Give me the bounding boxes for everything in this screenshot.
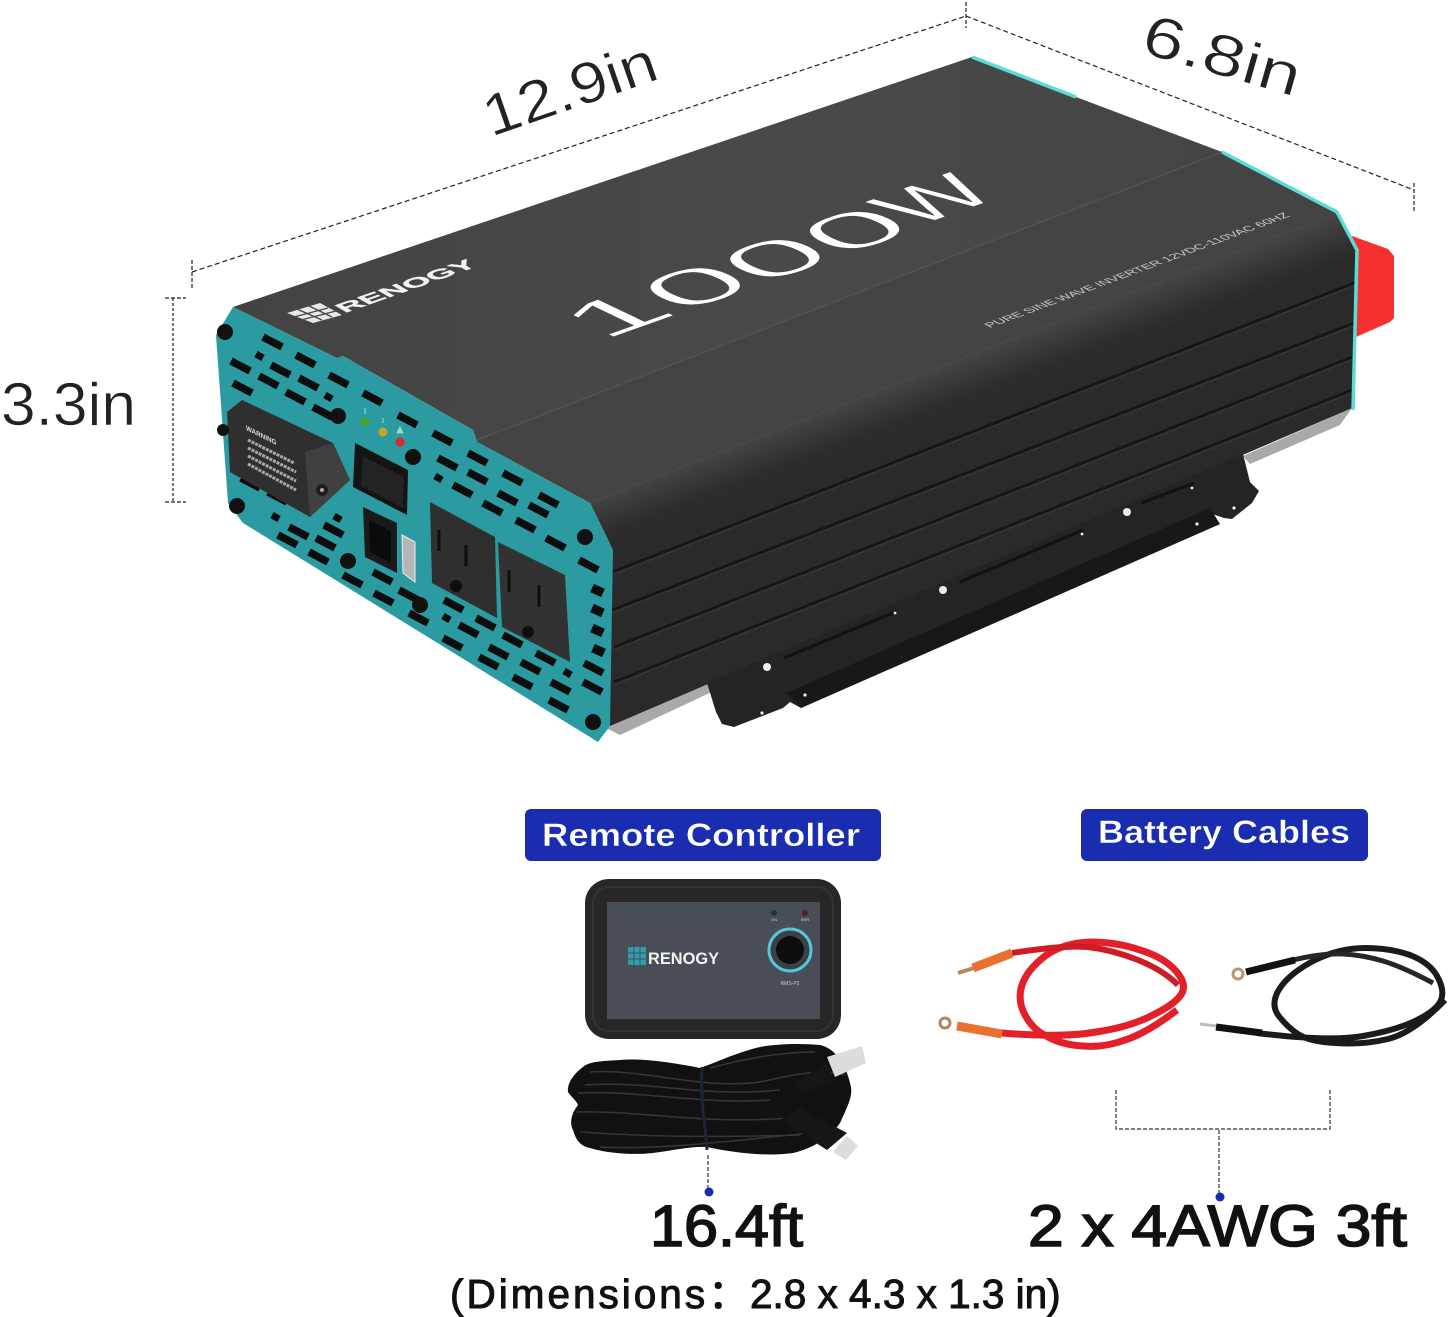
dimension: depth 6.8in [966, 2, 1414, 212]
AC outlet 2 [498, 542, 570, 662]
black battery cable [1200, 948, 1445, 1044]
top face [233, 57, 1337, 503]
orange sleeves and lugs [940, 953, 1012, 1034]
side face with grooves [590, 213, 1356, 726]
AC terminal box with warning label: WARNING [246, 425, 277, 447]
bracket: cable callout [1116, 1090, 1330, 1202]
label: Battery Cables: Battery Cables [1098, 814, 1350, 850]
cable tie [702, 1067, 707, 1150]
AC terminal box with warning label [227, 400, 350, 517]
lid ridge strip [477, 152, 1337, 503]
label: Remote Controller: Remote Controller [542, 817, 860, 853]
leader: remote cable [704, 1155, 714, 1196]
remote logo: RENOGY [648, 949, 720, 968]
USB port [402, 535, 415, 582]
remote LEDs: ON [771, 917, 777, 922]
red terminal cover [1352, 236, 1394, 337]
panel screws [217, 324, 601, 730]
teal rear edge [972, 57, 1357, 410]
remote logo [628, 947, 720, 968]
bracket holes [760, 487, 1236, 715]
coiled remote cable [568, 1044, 866, 1160]
Renogy logo on lid [287, 257, 484, 323]
model text on lid: PURE SINE WAVE INVERTER 12VDC-110VAC 60HZ [982, 211, 1294, 330]
status LEDs [360, 408, 404, 446]
1000W label [535, 164, 1020, 349]
1000W label: W [849, 164, 1020, 235]
RJ plug bottom [780, 1108, 858, 1160]
black sleeves and lugs [1200, 960, 1295, 1033]
remote port [363, 507, 397, 573]
dimension: width 12.9in [192, 2, 966, 288]
Renogy logo on lid: RENOGY [330, 257, 484, 315]
grey underside edge [606, 408, 1352, 735]
dimension: height 3.3in [1, 298, 186, 502]
remote dimensions note: 2.8 x 4.3 x 1.3 in) [750, 1271, 1061, 1317]
remote cable length: 16.4ft [650, 1194, 803, 1259]
power switch [353, 443, 408, 515]
dimension: height 3.3in: 3.3in [1, 371, 136, 438]
remote LEDs: ERR [801, 917, 809, 922]
1000W label: 1000 [535, 196, 937, 349]
mounting bracket [707, 454, 1259, 727]
teal front panel [216, 307, 613, 742]
remote LEDs: RMS-P2 [781, 981, 800, 987]
remote dimensions note: (Dimensions： [450, 1271, 749, 1317]
dimension: width 12.9in: 12.9in [474, 29, 665, 149]
dimension: depth 6.8in: 6.8in [1135, 2, 1309, 109]
label: Battery Cables [1081, 809, 1368, 861]
ventilation slots [231, 337, 604, 710]
AC outlet 1 [430, 502, 497, 618]
remote knob [769, 929, 811, 971]
inverter product [216, 57, 1394, 742]
remote controller [585, 879, 841, 1039]
bracket slots [784, 483, 1194, 658]
label: Remote Controller [525, 809, 881, 861]
battery cable spec: 2 x 4AWG 3ft [1028, 1194, 1407, 1259]
remote LEDs [771, 910, 809, 987]
red battery cable [940, 942, 1183, 1046]
RJ plug top [793, 1046, 866, 1092]
